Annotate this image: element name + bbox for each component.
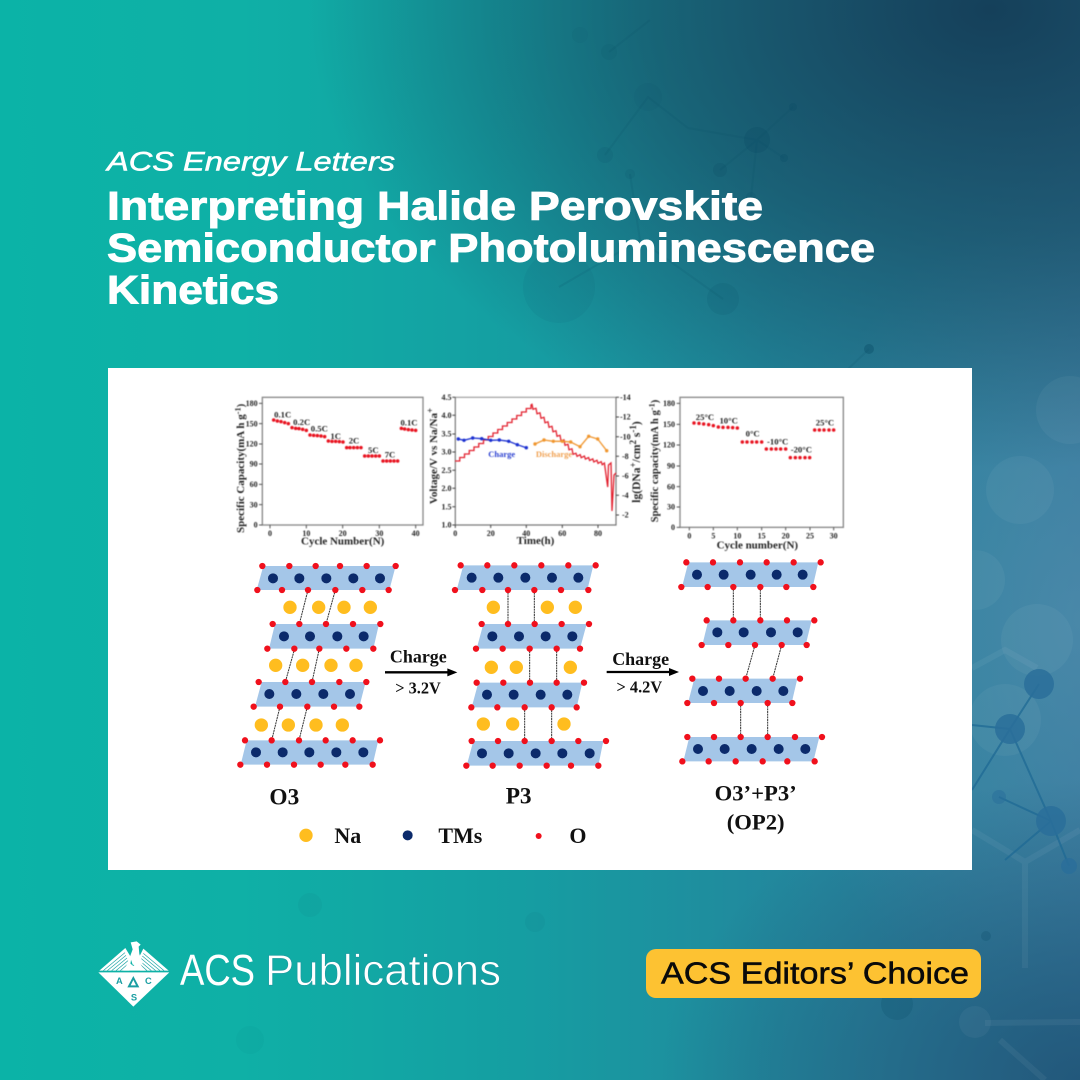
- chart: voltage and diffusion coefficient: -2: [622, 511, 629, 520]
- chart: rate capability: 0: [268, 529, 272, 538]
- chart: voltage and diffusion coefficient: Discharge: [536, 449, 572, 459]
- chart: voltage and diffusion coefficient: -10: [620, 432, 631, 441]
- chart: voltage and diffusion coefficient: /cm: [631, 444, 643, 463]
- arrow: charge above 4.2V: Charge: [612, 649, 669, 669]
- chart: voltage and diffusion coefficient: -1: [628, 425, 638, 433]
- chart: rate capability: -1: [234, 407, 243, 414]
- background molecule network: [236, 20, 1080, 1080]
- arrow: charge above 3.2V: > 3.2V: [395, 679, 441, 698]
- chart: temperature performance: Specific capacity(mA h g: [650, 410, 661, 522]
- badge: ACS Editors' Choice: ACS Editors’ Choice: [661, 956, 969, 990]
- chart: rate capability: 180: [246, 399, 258, 408]
- chart: rate capability: 5C: [368, 445, 379, 455]
- chart: voltage and diffusion coefficient: +: [628, 462, 638, 468]
- chart: rate capability: Cycle Number(N): [301, 535, 385, 547]
- chart: rate capability: 90: [250, 460, 258, 469]
- chart: voltage and diffusion coefficient: 60: [558, 529, 566, 538]
- article title: Kinetics: [107, 268, 279, 312]
- chart: voltage and diffusion coefficient: 4.5: [442, 393, 452, 402]
- chart: voltage and diffusion coefficient: 20: [487, 529, 495, 538]
- logo: ACS Publications wordmark: ACS: [180, 946, 255, 995]
- chart: temperature performance: -1: [648, 403, 657, 410]
- chart: voltage and diffusion coefficient: Time(h): [517, 535, 555, 547]
- badge: ACS Editors' Choice: [646, 949, 981, 998]
- structure: O3'+P3': [681, 562, 822, 761]
- journal name: ACS Energy Letters: [105, 146, 395, 176]
- chart: voltage and diffusion coefficient: 40: [522, 529, 530, 538]
- chart: voltage and diffusion coefficient: -14: [620, 393, 631, 402]
- chart: temperature performance: 150: [663, 420, 675, 429]
- arrow: charge above 4.2V: [607, 649, 679, 697]
- chart: rate capability: 30: [375, 529, 383, 538]
- chart: temperature performance: 10: [733, 531, 741, 540]
- chart: rate capability: 0.1C: [274, 410, 291, 420]
- chart: rate capability: 60: [250, 480, 258, 489]
- chart: rate capability: Specific Capacity(mA h g: [235, 414, 247, 533]
- chart: temperature performance: 5: [711, 531, 715, 540]
- chart: rate capability: 2C: [349, 436, 359, 446]
- chart: voltage and diffusion coefficient: 2: [628, 440, 638, 445]
- chart: temperature performance: 120: [663, 441, 675, 450]
- chart: voltage and diffusion coefficient: ): [631, 421, 643, 425]
- chart: voltage and diffusion coefficient: 2.0: [442, 484, 452, 493]
- chart: rate capability: 0.1C: [400, 417, 418, 427]
- chart: temperature performance: 180: [663, 399, 675, 408]
- chart: rate capability: 7C: [385, 450, 395, 460]
- chart: temperature performance: 25°C: [696, 412, 714, 422]
- chart: voltage and diffusion coefficient: 0: [453, 529, 457, 538]
- chart: temperature performance: 30: [667, 503, 675, 512]
- chart: temperature performance: 10°C: [719, 415, 738, 425]
- chart: temperature performance: Cycle number(N): [717, 539, 798, 551]
- chart: temperature performance: ): [650, 399, 661, 403]
- chart: voltage and diffusion coefficient: +: [425, 408, 435, 413]
- chart: temperature performance: 25°C: [816, 418, 834, 428]
- chart: voltage and diffusion coefficient: -4: [622, 491, 629, 500]
- diagram: O3 to P3 structures: [240, 565, 606, 848]
- panel: figure: [108, 368, 972, 870]
- chart: rate capability: 150: [246, 419, 258, 428]
- label: P3: P3: [506, 783, 532, 809]
- label: O3: O3: [269, 784, 299, 810]
- chart: temperature performance: 0: [671, 523, 675, 532]
- chart: temperature performance: 60: [667, 482, 675, 491]
- chart: voltage and diffusion coefficient: -8: [622, 452, 629, 461]
- label: O3'+P3' (OP2): O3’+P3’: [715, 781, 797, 806]
- chart: voltage and diffusion coefficient: 3.0: [442, 448, 452, 457]
- chart: voltage and diffusion coefficient: 80: [594, 529, 602, 538]
- chart: rate capability: 10: [302, 529, 310, 538]
- chart: temperature performance: -20°C: [791, 444, 812, 454]
- label: O3'+P3' (OP2): (OP2): [727, 809, 785, 834]
- chart: rate capability: 30: [250, 500, 258, 509]
- logo: ACS emblem: C: [145, 976, 152, 986]
- arrow: charge above 3.2V: Charge: [390, 646, 447, 666]
- chart: rate capability: 0.5C: [311, 423, 328, 433]
- logo: ACS Publications wordmark: Publications: [265, 946, 501, 995]
- chart: temperature performance: 0°C: [746, 429, 760, 439]
- chart: rate capability: [234, 397, 423, 547]
- article title: Semiconductor Photoluminescence: [107, 226, 875, 270]
- chart: rate capability: 40: [412, 529, 420, 538]
- chart: temperature performance: -10°C: [767, 437, 788, 447]
- chart: voltage and diffusion coefficient: 2.5: [442, 466, 452, 475]
- legend: TMs: [438, 823, 483, 848]
- chart: temperature performance: 15: [758, 531, 766, 540]
- chart: voltage and diffusion coefficient: Voltage/V vs Na/Na: [428, 413, 440, 504]
- chart: voltage and diffusion coefficient: -6: [622, 472, 629, 481]
- chart: temperature performance: 90: [667, 462, 675, 471]
- chart: rate capability: 0.2C: [293, 417, 310, 427]
- chart: voltage and diffusion coefficient: s: [631, 432, 643, 440]
- arrow: charge above 4.2V: > 4.2V: [617, 678, 662, 697]
- chart: voltage and diffusion coefficient: -12: [620, 413, 631, 422]
- arrow: charge above 3.2V: [385, 646, 457, 698]
- structure: P3: [455, 565, 606, 766]
- chart: voltage and diffusion coefficient: 4.0: [442, 411, 452, 420]
- article title: Interpreting Halide Perovskite: [107, 184, 763, 228]
- chart: temperature performance: 25: [806, 531, 814, 540]
- chart: temperature performance: 0: [687, 531, 691, 540]
- chart: voltage and diffusion coefficient: [425, 393, 643, 547]
- structure: O3: [240, 566, 396, 765]
- label: O3'+P3' (OP2): [715, 781, 797, 834]
- chart: rate capability: 120: [246, 440, 258, 449]
- diagram: P3 to OP2 structure: [607, 562, 822, 834]
- chart: rate capability: 20: [339, 529, 347, 538]
- chart: temperature performance: 30: [830, 531, 838, 540]
- article title: [107, 184, 875, 312]
- chart: rate capability: ): [235, 403, 247, 407]
- chart: voltage and diffusion coefficient: lg(DNa: [631, 468, 643, 503]
- chart: voltage and diffusion coefficient: 1.0: [442, 521, 452, 530]
- chart: rate capability: 1C: [330, 431, 341, 441]
- legend: O: [569, 823, 586, 848]
- chart: voltage and diffusion coefficient: 1.5: [442, 502, 452, 511]
- legend: Na: [334, 823, 361, 848]
- chart: rate capability: 0: [254, 521, 258, 530]
- logo: ACS emblem: S: [131, 993, 137, 1003]
- chart: voltage and diffusion coefficient: 3.5: [442, 430, 452, 439]
- logo: ACS emblem: [98, 941, 169, 1007]
- logo: ACS emblem: A: [116, 976, 123, 986]
- chart: temperature performance: 20: [782, 531, 790, 540]
- legend: [299, 823, 586, 848]
- chart: temperature performance: [648, 397, 843, 551]
- chart: voltage and diffusion coefficient: Charge: [488, 449, 515, 459]
